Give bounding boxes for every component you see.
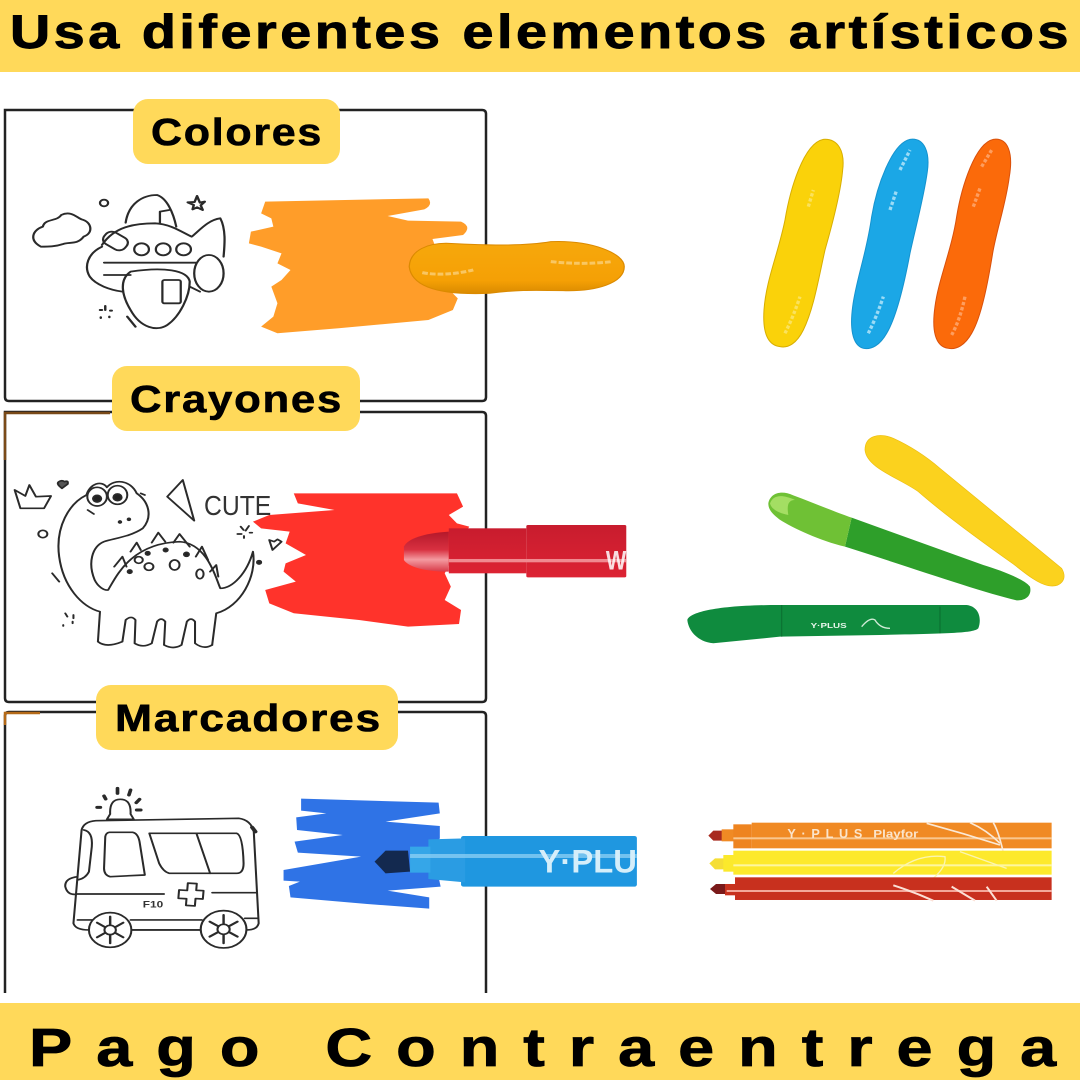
icon: blue marker [375, 836, 637, 887]
orange marker [708, 823, 1052, 868]
label: colores [133, 99, 340, 164]
yellow marker [709, 851, 1052, 878]
label: crayones [112, 366, 360, 431]
icon: red gel crayon [404, 525, 627, 577]
label: colores: Colores [151, 112, 323, 154]
yellow stick [764, 139, 843, 347]
crayon brand fragment: W [606, 546, 627, 576]
blue marker swatch [284, 799, 441, 909]
label: marcadores [96, 685, 398, 750]
icon: three colour sticks [764, 139, 1011, 349]
crayon brand text: Y·PLUS [811, 623, 847, 630]
blue stick [852, 139, 928, 349]
label: marcadores: Marcadores [115, 698, 382, 740]
orange marker: Playfor [873, 828, 918, 840]
red crayon swatch [253, 493, 469, 627]
orange stick [934, 139, 1011, 349]
icon: dinosaur drawing [15, 480, 282, 647]
marker brand text: Y·PLUS [787, 827, 862, 841]
icon: ambulance drawing [65, 788, 259, 948]
footer text: Pago Contraentrega [29, 1017, 1057, 1078]
icon: three markers [708, 823, 1052, 901]
label: crayones: Crayones [130, 379, 343, 421]
icon: three gel crayons [687, 436, 1064, 643]
marker brand fragment: Y·PLU [539, 843, 637, 880]
bottom banner [0, 1003, 1080, 1080]
red marker [710, 877, 1052, 901]
dark green crayon [687, 605, 980, 643]
panel: marcadores frame [5, 712, 486, 993]
panel: colores frame [5, 110, 486, 401]
top banner [0, 0, 1080, 72]
icon: airplane drawing [33, 195, 225, 328]
icon: orange colour stick [409, 242, 624, 294]
orange colour swatch [249, 198, 467, 333]
ambulance number: F10 [143, 900, 163, 910]
title: Usa diferentes elementos artísticos [10, 5, 1072, 58]
yellow crayon [865, 436, 1064, 586]
green crayon [768, 493, 1030, 600]
panel: crayones frame [5, 412, 486, 702]
cute label: CUTE [204, 490, 271, 521]
